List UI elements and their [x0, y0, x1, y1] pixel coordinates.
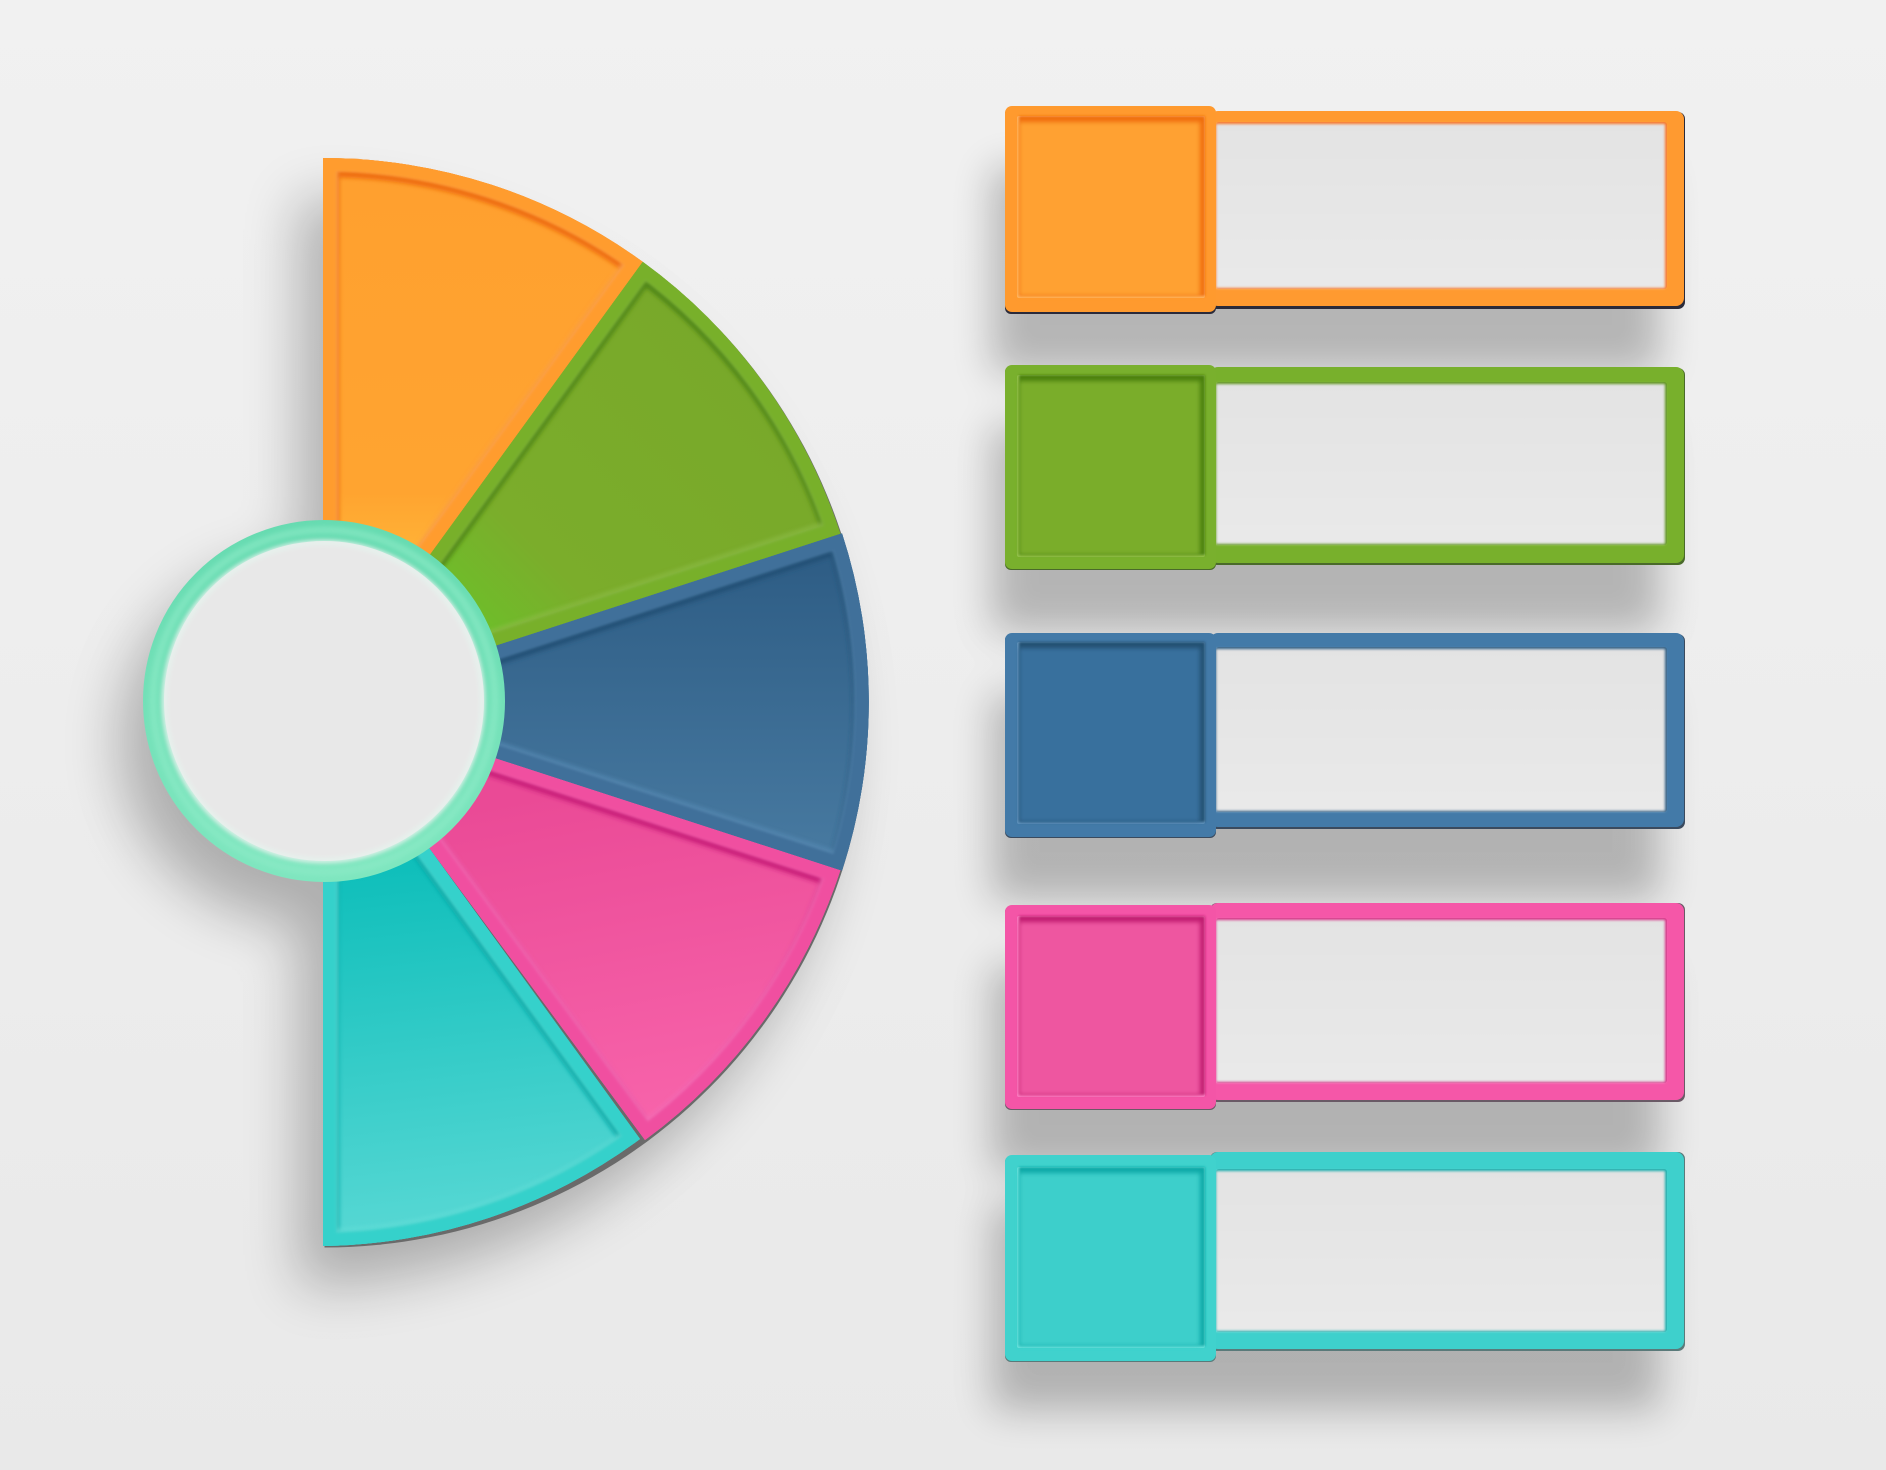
infographic canvas — [88, 106, 1689, 1439]
label frame — [1210, 111, 1684, 306]
segment: orange — [323, 156, 643, 584]
segment: teal — [323, 821, 640, 1249]
colour square — [1005, 905, 1216, 1109]
segment: green — [411, 260, 840, 659]
segment: pink — [411, 746, 840, 1143]
colour square — [1005, 106, 1216, 312]
fan dark underside edge — [324, 160, 868, 1248]
fan chart — [153, 156, 869, 1249]
colour square — [1005, 365, 1216, 569]
centre ring and disc — [153, 530, 495, 872]
legend bar: pink — [1005, 903, 1685, 1110]
label frame — [1210, 633, 1684, 827]
label frame — [1210, 903, 1684, 1100]
label frame — [1210, 1152, 1684, 1349]
shadow: fan chart — [119, 198, 843, 1286]
colour square — [1005, 633, 1216, 837]
colour square — [1005, 1155, 1216, 1361]
legend bar: blue — [1005, 633, 1685, 838]
segment: blue — [466, 531, 869, 874]
legend bar: green — [1005, 365, 1685, 570]
legend bar: orange — [1005, 106, 1685, 314]
shadows: legend bars — [992, 168, 1660, 1410]
label frame — [1210, 367, 1684, 563]
legend bar: teal — [1005, 1152, 1685, 1362]
